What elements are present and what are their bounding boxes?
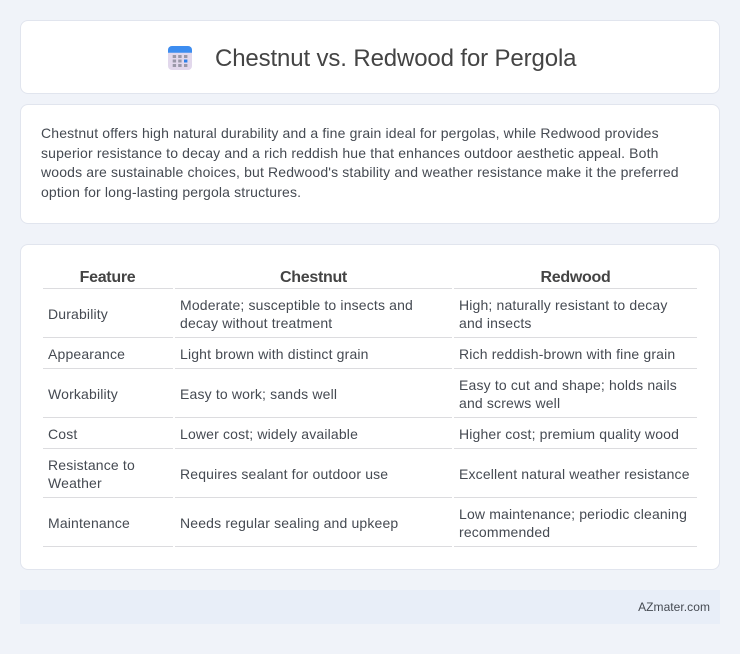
icon: calendar xyxy=(168,46,192,70)
table: Moderate; susceptible to insects and xyxy=(180,297,413,313)
title card xyxy=(20,20,720,94)
intro card xyxy=(20,104,720,224)
row: Appearance: Appearance xyxy=(48,346,125,362)
row: Durability: Durability xyxy=(48,306,108,322)
table: and insects xyxy=(459,315,532,331)
row: Maintenance: Maintenance xyxy=(48,515,130,531)
table: Easy to work; sands well xyxy=(180,386,337,402)
row: Cost: Cost xyxy=(48,426,77,442)
table: recommended xyxy=(459,524,550,540)
table: High; naturally resistant to decay xyxy=(459,297,668,313)
intro text: option for long-lasting pergola structures. xyxy=(41,184,301,200)
table: decay without treatment xyxy=(180,315,332,331)
table: Rich reddish-brown with fine grain xyxy=(459,346,675,362)
header: Chestnut: Chestnut xyxy=(280,269,347,286)
table: Easy to cut and shape; holds nails xyxy=(459,377,677,393)
title: Chestnut vs. Redwood for Pergola xyxy=(215,45,576,72)
intro text: Chestnut offers high natural durability and a fine grain ideal for pergolas, while Redwood provides xyxy=(41,125,659,141)
table: Lower cost; widely available xyxy=(180,426,358,442)
intro text xyxy=(41,125,679,200)
row: Workability: Workability xyxy=(48,386,118,402)
table: and screws well xyxy=(459,395,560,411)
table: Excellent natural weather resistance xyxy=(459,466,690,482)
table card xyxy=(20,244,720,570)
table: Requires sealant for outdoor use xyxy=(180,466,388,482)
row: Resistance to Weather: Weather xyxy=(48,475,102,491)
table: Needs regular sealing and upkeep xyxy=(180,515,398,531)
intro text: woods are sustainable choices, but Redwood's stability and weather resistance make it the preferred xyxy=(41,164,679,180)
footer credit: AZmater.com xyxy=(638,600,710,614)
footer bar xyxy=(20,590,720,624)
table: Low maintenance; periodic cleaning xyxy=(459,506,687,522)
header: Redwood: Redwood xyxy=(541,269,610,286)
header: Feature: Feature xyxy=(80,269,135,286)
intro text: superior resistance to decay and a rich reddish hue that enhances outdoor aesthetic appeal. Both xyxy=(41,145,659,161)
table: Higher cost; premium quality wood xyxy=(459,426,679,442)
table: Light brown with distinct grain xyxy=(180,346,369,362)
row: Resistance to Weather xyxy=(48,457,135,491)
row: Resistance to Weather: Resistance to xyxy=(48,457,135,473)
